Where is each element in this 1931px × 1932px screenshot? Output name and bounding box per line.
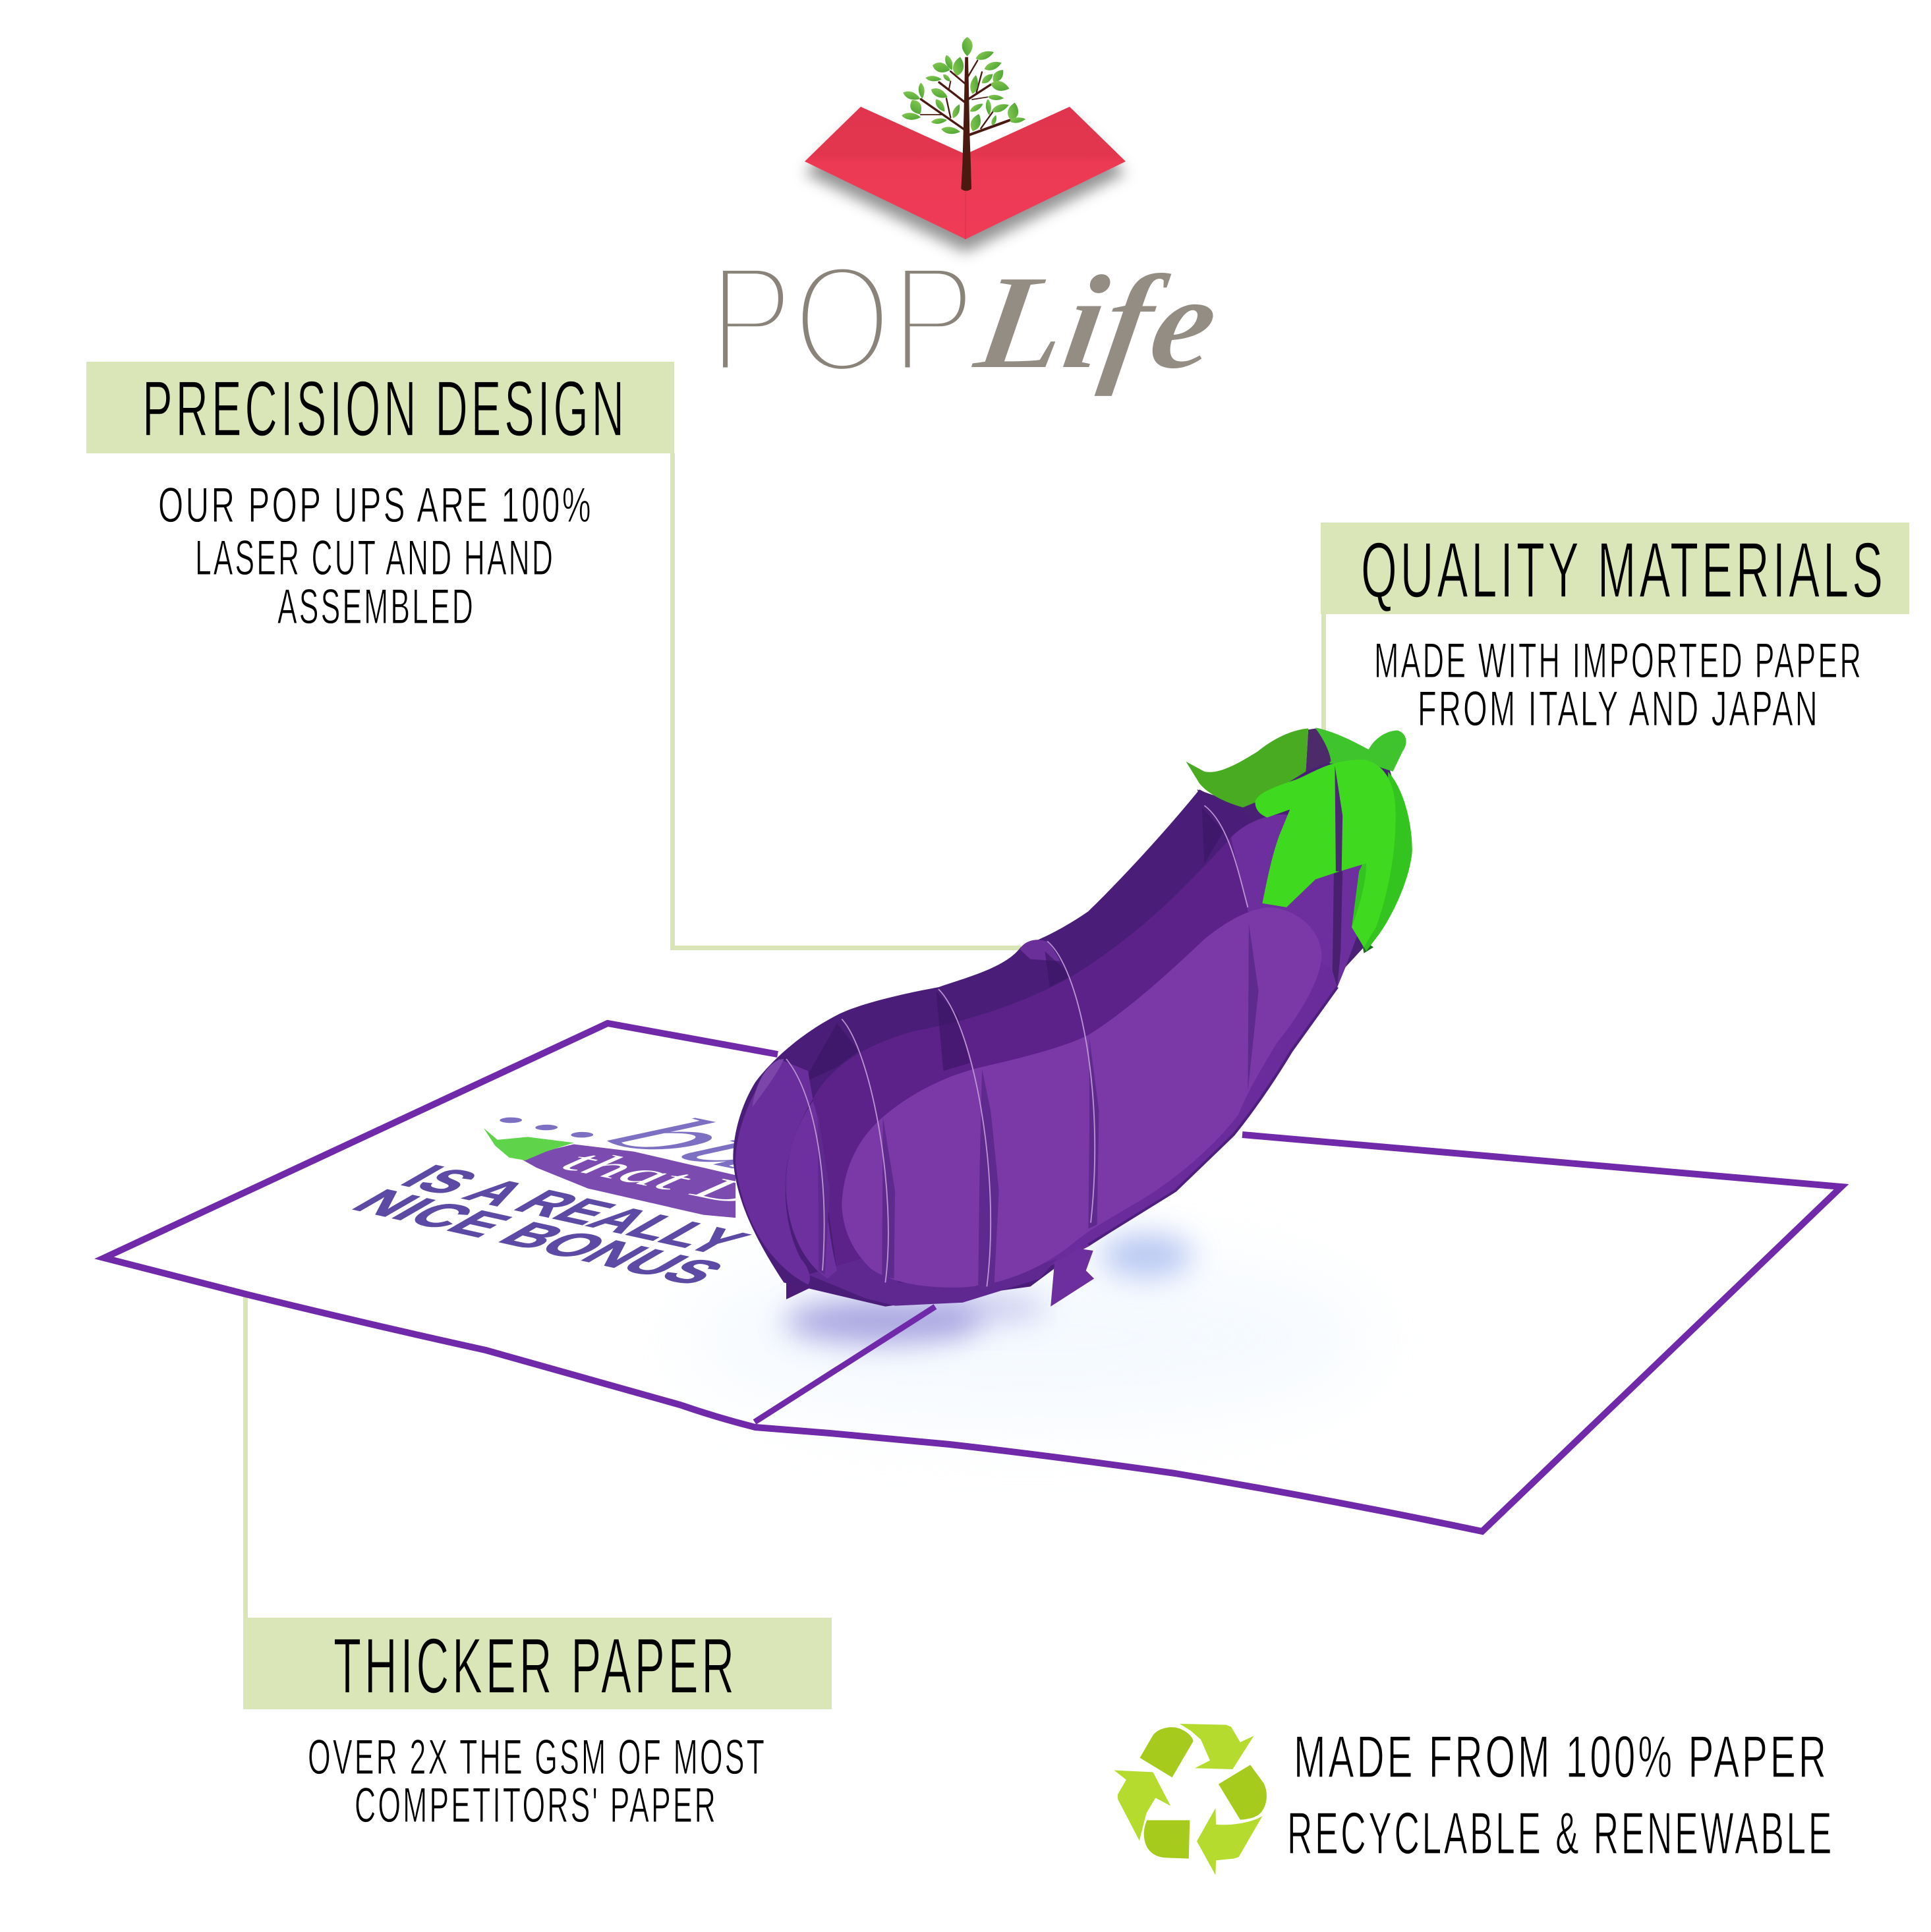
connector lines [243,453,1326,1618]
bottom layer [808,1259,1057,1306]
body text: ASSEMBLED [277,579,475,634]
icon: recycling arrows [1114,1724,1267,1875]
neck slot [1333,871,1342,987]
heading: PRECISION DESIGN [142,365,627,453]
pop-up card [104,1023,1841,1531]
rib edges [786,805,1248,1286]
wordmark: Life: Life [966,246,1228,397]
body text [308,1729,766,1833]
heading band [243,1618,832,1709]
neck backing [1197,756,1407,1051]
recycling statement [1287,1724,1834,1867]
back wall [733,789,1291,1307]
panel: precision design [86,362,674,634]
printed message: IS A REALLY [387,1158,762,1261]
body text: OUR POP UPS ARE 100% [158,477,593,532]
panel: thicker paper [243,1618,832,1833]
heading band [86,362,674,453]
printed message [338,1086,892,1292]
logo: POP Life [709,37,1228,405]
small eggplant [484,1128,735,1218]
body text: COMPETITORS' PAPER [355,1777,718,1833]
body text: LASER CUT AND HAND [195,530,555,585]
eggplant pop-up [733,727,1412,1307]
body text: OVER 2X THE GSM OF MOST [308,1729,766,1784]
card fold line [755,1307,935,1422]
left and right card panel outlines [104,1023,1841,1531]
stand tabs [786,1249,1094,1307]
body text [158,477,593,634]
icon: red open book [805,107,1126,252]
heading band [1321,523,1909,614]
card shadows [685,1233,1371,1423]
front leaf [1255,760,1412,953]
heading: THICKER PAPER [333,1622,737,1710]
neck section [1231,814,1369,999]
printed message: NICE BONUS [338,1183,739,1292]
front slots [818,923,1259,1289]
wordmark: POP: POP [709,234,975,405]
second lens [786,1101,837,1278]
right outer section [1025,959,1337,1278]
printed message: ...but [464,1086,892,1187]
front face [842,907,1322,1288]
body text [1374,633,1863,736]
back wall slots [803,807,1224,1083]
rib tip [1020,940,1060,961]
panel: quality materials [1321,523,1909,736]
back leaves [1186,727,1406,807]
icon: tree [902,37,1026,191]
printed message: that D [548,1144,778,1211]
outer lens [735,1059,813,1284]
mid layer [813,838,1296,1270]
right outer edge [1088,987,1337,1245]
